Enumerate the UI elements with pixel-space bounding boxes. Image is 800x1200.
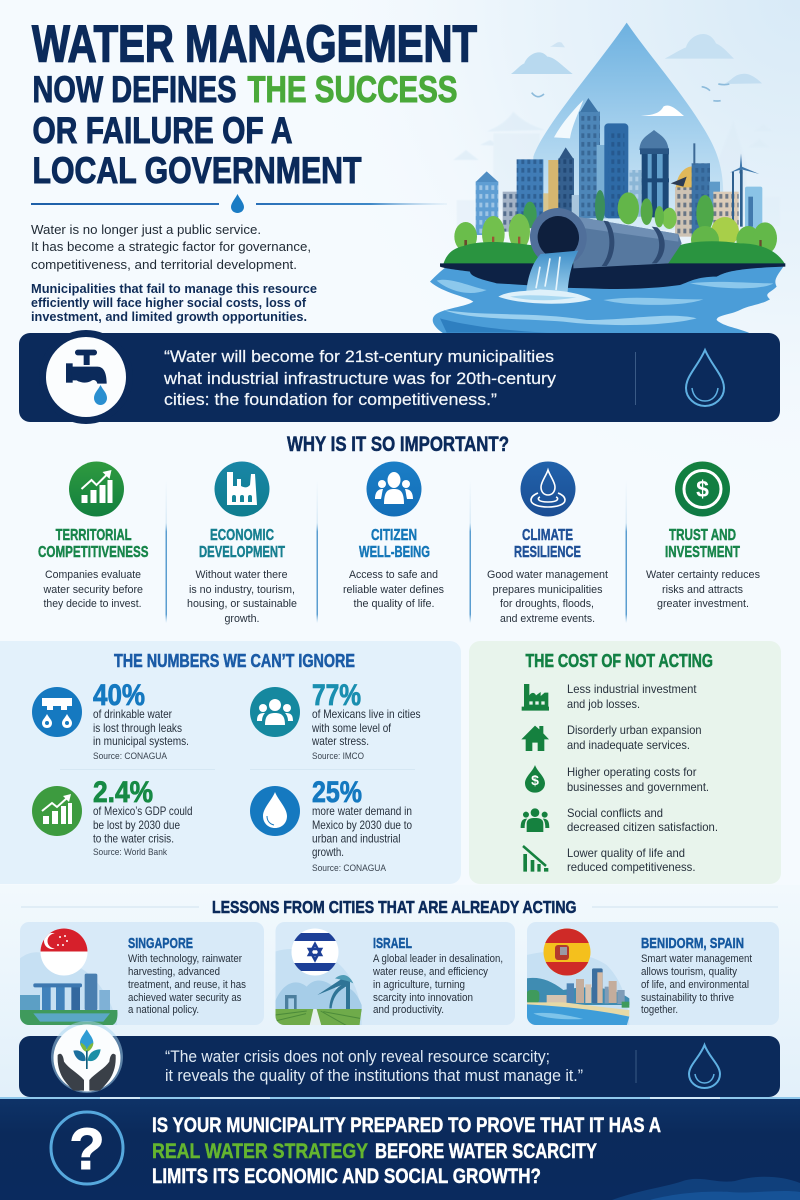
panel: the cost of not acting: and inadequate services.: [567, 739, 690, 752]
card: Israel: [275, 922, 515, 1027]
panel: the cost of not acting: THE COST OF NOT ACTING: [526, 650, 713, 671]
column: territorial competitiveness: Companies evaluate: [45, 569, 141, 581]
column: trust and investment: INVESTMENT: [665, 544, 740, 561]
stat: 40%: in municipal systems.: [93, 735, 189, 748]
column: economic development: housing, or sustainable: [187, 598, 297, 610]
section heading: why is it so important: WHY IS IT SO IMPORTANT?: [287, 433, 509, 456]
decorative waves: [612, 1177, 800, 1200]
stat: 40%: 40%: [93, 679, 145, 712]
pale background skyline: [453, 112, 780, 227]
panel: the cost of not acting: Higher operating costs for: [567, 766, 697, 779]
stat: 2.4%: to the water crisis.: [93, 832, 174, 846]
intro text: investment, and limited growth opportunities.: [31, 309, 307, 324]
column: citizen well-being: reliable water defines: [343, 584, 444, 596]
card: Benidorm, Spain: [527, 922, 779, 1026]
icon: leaking pipe: [32, 687, 82, 737]
stat: 25%: [250, 776, 412, 873]
column: trust and investment: TRUST AND: [669, 527, 736, 544]
footer call to action: [0, 1097, 800, 1200]
column: economic development: growth.: [224, 613, 260, 625]
card: Singapore: harvesting, advanced: [128, 966, 220, 978]
panel: the cost of not acting: reduced competitiveness.: [567, 861, 696, 874]
card: Singapore: [20, 922, 264, 1026]
stat: 77%: with some level of: [311, 722, 392, 735]
column: territorial competitiveness: [38, 462, 149, 610]
icon: water drop outline: [689, 1045, 720, 1088]
card: Singapore: With technology, rainwater: [128, 953, 242, 965]
panel: the cost of not acting: and job losses.: [567, 698, 640, 711]
icon: question mark: ?: [69, 1117, 105, 1182]
column: citizen well-being: Access to safe and: [349, 569, 438, 581]
quote text: “The water crisis does not only reveal resource scarcity;: [165, 1048, 550, 1066]
quote text: [165, 1048, 583, 1085]
intro text: competitiveness, and territorial development.: [31, 257, 297, 272]
water: [430, 263, 785, 333]
column: trust and investment: greater investment.: [657, 598, 749, 610]
stat: 2.4%: 2.4%: [93, 776, 153, 809]
column: territorial competitiveness: COMPETITIVENESS: [38, 544, 149, 561]
icon: question mark: [51, 1112, 123, 1184]
pipe with outflow: [498, 202, 682, 304]
stat: 40%: of drinkable water: [93, 708, 172, 721]
illustration: Israel farmland: [275, 949, 362, 1027]
stat: 25%: urban and industrial: [312, 832, 400, 846]
intro text: [31, 222, 317, 324]
closing question: IS YOUR MUNICIPALITY PREPARED TO PROVE THAT IT HAS A: [152, 1114, 661, 1137]
card: Israel: ISRAEL: [373, 936, 412, 952]
card: Israel: water reuse, and efficiency: [372, 966, 489, 978]
stat: 77%: Source: IMCO: [312, 750, 364, 761]
icon: drop with ripples: [520, 462, 576, 516]
flag: Singapore: [40, 928, 88, 976]
icon: factory: [214, 462, 270, 516]
icon: water drop outline: [686, 350, 724, 406]
panel: the cost of not acting: decreased citizen satisfaction.: [567, 821, 718, 834]
large water drop: [533, 23, 723, 230]
stat: 25%: Source: CONAGUA: [312, 862, 387, 873]
column: trust and investment: risks and attracts: [662, 584, 743, 596]
title: WATER MANAGEMENT: [32, 16, 477, 74]
icon: people: [250, 687, 300, 737]
stat: 2.4%: [32, 776, 192, 857]
closing question: BEFORE WATER SCARCITY: [375, 1140, 597, 1163]
panel: the cost of not acting: Social conflicts and: [567, 807, 663, 820]
closing question: REAL WATER STRATEGY: [152, 1140, 368, 1163]
panel: the cost of not acting: Lower quality of life and: [567, 847, 685, 860]
stat: 40%: [32, 679, 189, 761]
intro text: Municipalities that fail to manage this resource: [31, 281, 317, 296]
column: trust and investment: [646, 462, 760, 610]
title divider with water drop: [31, 194, 447, 213]
column: climate resilience: [487, 462, 609, 625]
column: climate resilience: for droughts, floods,: [500, 598, 594, 610]
icon: growth chart: [32, 786, 82, 836]
stat: 77%: of Mexicans live in cities: [312, 708, 421, 721]
icon: dollar coin: $: [696, 476, 709, 502]
column: territorial competitiveness: they decide to invest.: [44, 598, 142, 610]
card: Israel: in agriculture, turning: [373, 979, 465, 991]
stat: 77%: [250, 679, 421, 761]
card: Benidorm, Spain: BENIDORM, SPAIN: [641, 936, 744, 952]
panel: the cost of not acting: Disorderly urban expansion: [567, 724, 702, 737]
quote banner: faucet: [19, 330, 780, 424]
card: Benidorm, Spain: together.: [641, 1004, 678, 1016]
column: territorial competitiveness: water security before: [43, 584, 143, 596]
hero illustration: city in a water drop with pipe: [430, 23, 785, 333]
card: Benidorm, Spain: sustainability to thrive: [641, 992, 734, 1004]
birds: [532, 84, 729, 101]
quote text: [163, 347, 557, 409]
title: THE SUCCESS: [248, 69, 458, 110]
cost icons: [521, 684, 549, 872]
column: economic development: DEVELOPMENT: [199, 544, 285, 561]
icon: water drop: [250, 786, 300, 836]
column: economic development: ECONOMIC: [210, 527, 274, 544]
column: climate resilience: CLIMATE: [522, 527, 573, 544]
section heading: lessons from cities: LESSONS FROM CITIES THAT ARE ALREADY ACTING: [212, 897, 576, 917]
panel: the cost of not acting: $: [531, 772, 539, 788]
stat: 25%: 25%: [312, 776, 362, 809]
stat: 40%: Source: CONAGUA: [93, 750, 168, 761]
panel: the cost of not acting: Less industrial investment: [567, 683, 697, 696]
title: LOCAL GOVERNMENT: [32, 150, 362, 191]
stat: 2.4%: be lost by 2030 due: [93, 819, 180, 832]
stat: 2.4%: of Mexico’s GDP could: [93, 805, 192, 818]
quote text: “Water will become for 21st-century municipalities: [164, 347, 554, 366]
card: Israel: scarcity into innovation: [373, 992, 473, 1004]
column: citizen well-being: WELL-BEING: [359, 544, 430, 561]
stat: 2.4%: Source: World Bank: [93, 846, 167, 857]
illustration: Singapore skyline: [20, 952, 117, 1026]
column: climate resilience: and extreme events.: [500, 613, 595, 625]
card: Singapore: SINGAPORE: [128, 936, 193, 952]
title: [32, 16, 477, 191]
card: Benidorm, Spain: of life, and environmental: [641, 979, 749, 991]
quote text: cities: the foundation for competitiveness.”: [164, 390, 497, 409]
card: Israel: A global leader in desalination,: [373, 953, 503, 965]
card: Singapore: a national policy.: [128, 1004, 199, 1016]
card: Singapore: treatment, and reuse, it has: [128, 979, 247, 991]
title: OR FAILURE OF A: [32, 110, 292, 151]
quote banner: institutions: [19, 1021, 780, 1097]
column: economic development: is no industry, tourism,: [189, 584, 295, 596]
panel: the cost of not acting: [469, 641, 781, 884]
icon: hands holding plant: [51, 1021, 123, 1093]
intro text: It has become a strategic factor for governance,: [31, 239, 311, 254]
closing question: LIMITS ITS ECONOMIC AND SOCIAL GROWTH?: [152, 1165, 541, 1188]
card: Benidorm, Spain: allows tourism, quality: [641, 966, 738, 978]
skyline buildings: [476, 98, 762, 237]
column: climate resilience: RESILIENCE: [514, 544, 581, 561]
stat: 25%: more water demand in: [312, 805, 412, 818]
column: citizen well-being: the quality of life.: [354, 598, 434, 610]
column: territorial competitiveness: TERRITORIAL: [56, 527, 132, 544]
card: Singapore: achieved water security as: [128, 992, 242, 1004]
column: citizen well-being: [343, 462, 444, 610]
title: NOW DEFINES: [32, 69, 236, 110]
panel: the cost of not acting: businesses and government.: [567, 781, 709, 794]
icon: rising chart: [69, 462, 124, 516]
stat: 25%: growth.: [312, 846, 344, 859]
stat: 77%: 77%: [312, 679, 361, 712]
column: climate resilience: prepares municipalities: [492, 584, 603, 596]
column: economic development: Without water there: [196, 569, 288, 581]
illustration: Benidorm coast: [527, 952, 629, 1026]
intro text: efficiently will face higher social costs, loss of: [31, 295, 307, 310]
column: climate resilience: Good water management: [487, 569, 609, 581]
closing question: [152, 1114, 661, 1188]
column: economic development: [187, 462, 297, 625]
stat: 40%: is lost through leaks: [93, 722, 182, 735]
icon: dollar coin: [675, 462, 730, 516]
column dividers: [166, 480, 627, 623]
panel: the numbers we can't ignore: [0, 641, 461, 884]
panel: the numbers we can't ignore: THE NUMBERS WE CAN’T IGNORE: [114, 650, 355, 671]
flag: Spain: [544, 928, 590, 976]
intro text: Water is no longer just a public service.: [31, 222, 261, 237]
stat: 77%: water stress.: [311, 735, 369, 748]
column: trust and investment: Water certainty reduces: [646, 569, 760, 581]
card: Benidorm, Spain: Smart water management: [641, 953, 752, 965]
quote text: it reveals the quality of the institutions that must manage it.”: [165, 1067, 583, 1085]
stat: 25%: Mexico by 2030 due to: [312, 819, 412, 832]
card: Israel: and productivity.: [373, 1004, 444, 1016]
column: citizen well-being: CITIZEN: [371, 527, 417, 544]
icon: people: [366, 462, 422, 516]
quote text: what industrial infrastructure was for 20th-century: [163, 369, 557, 388]
trees and green land: [443, 190, 785, 264]
icon: faucet with drop: [46, 337, 126, 417]
flag: Israel: [290, 928, 340, 976]
clouds: [511, 34, 762, 84]
